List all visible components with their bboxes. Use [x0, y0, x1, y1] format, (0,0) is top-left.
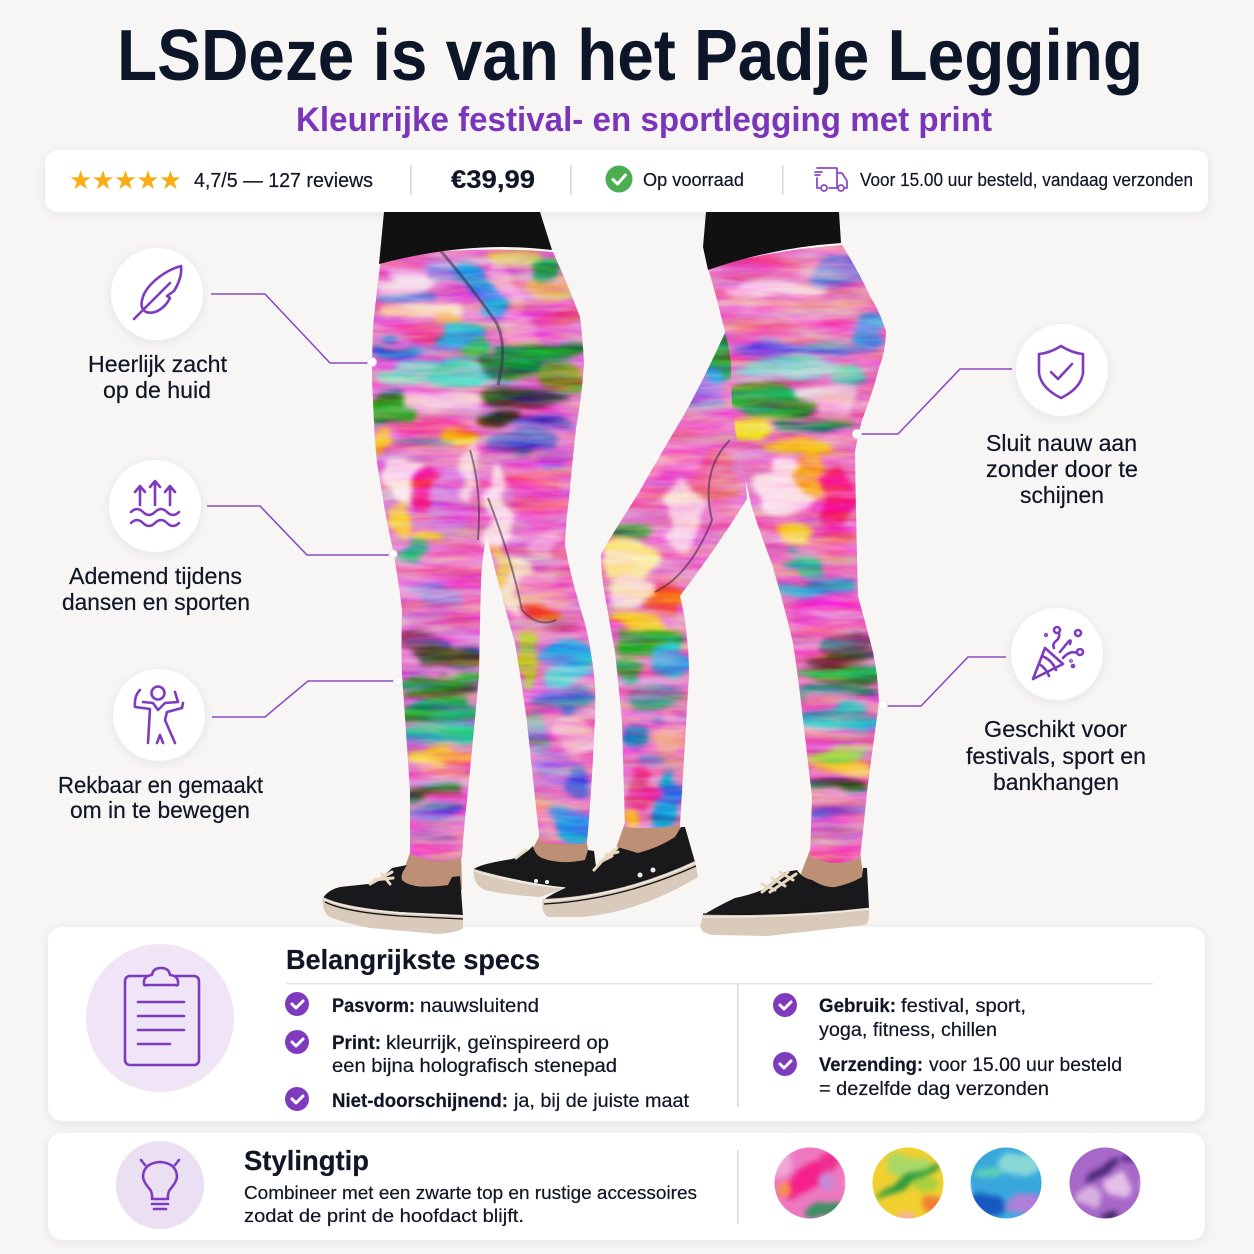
panel: styling tip	[48, 1133, 1205, 1240]
shoe: right front	[700, 868, 869, 936]
ankles	[398, 820, 864, 892]
icon: delivery truck	[815, 168, 847, 191]
spec: verzending: = dezelfde dag verzonden	[819, 1079, 1049, 1100]
price: €39,99	[451, 166, 535, 194]
label: dansen en sporten	[62, 589, 250, 615]
spec: pasvorm: Pasvorm:	[332, 996, 415, 1017]
spec: verzending: voor 15.00 uur besteld	[929, 1055, 1122, 1076]
label: festivals, sport en	[966, 743, 1146, 769]
spec: verzending: Verzending:	[819, 1055, 923, 1076]
tip text	[244, 1182, 697, 1226]
icon: feather	[134, 266, 181, 319]
feature: fit	[986, 324, 1138, 508]
feature: breathable	[62, 460, 250, 615]
spec: print: kleurrijk, geïnspireerd op	[386, 1033, 609, 1054]
heading: Belangrijkste specs	[286, 944, 540, 975]
icon: clipboard	[86, 944, 234, 1092]
stock text: Op voorraad	[643, 169, 744, 190]
front leg knee & calf	[408, 612, 471, 636]
spec: verzending	[773, 1052, 1122, 1100]
spec: print: Print:	[332, 1033, 381, 1054]
leggings: right figure back leg	[601, 332, 747, 828]
spec: gebruik	[773, 993, 1026, 1041]
feature: festivals	[966, 608, 1146, 795]
label: schijnen	[1020, 482, 1104, 508]
label	[986, 430, 1138, 508]
callout line: soft	[211, 294, 376, 366]
swatch: pink	[774, 1148, 846, 1218]
green band back	[490, 338, 584, 366]
leggings: left figure	[372, 250, 596, 862]
label	[88, 351, 228, 403]
swatch: yellow-green	[872, 1148, 944, 1218]
spec: gebruik: festival, sport,	[901, 996, 1026, 1017]
label: bankhangen	[993, 769, 1119, 795]
shoe: left front	[323, 865, 463, 934]
icon: rising air over waves	[131, 481, 179, 526]
spec: gebruik: Gebruik:	[819, 996, 896, 1017]
spec: print	[285, 1030, 617, 1077]
swatch: blue-teal	[970, 1148, 1042, 1218]
panel: specs	[48, 927, 1205, 1121]
label: Ademend tijdens	[69, 563, 242, 589]
feature: soft	[88, 248, 228, 403]
label: Geschikt voor	[984, 716, 1127, 742]
icon: shield	[1039, 346, 1083, 398]
label	[58, 772, 264, 823]
label	[62, 563, 250, 615]
rating stars: ★★★★★	[69, 166, 182, 196]
spec: gebruik: yoga, fitness, chillen	[819, 1020, 997, 1041]
back leg mid	[487, 465, 509, 565]
back leg calf	[516, 636, 538, 684]
black top: left	[379, 212, 552, 264]
callout line: breathable	[207, 506, 397, 558]
title: LSDeze is van het Padje Legging	[117, 16, 1143, 96]
spec: niet-doorschijnend: ja, bij de juiste maat	[513, 1091, 690, 1112]
subtitle: Kleurrijke festival- en sportlegging met print	[296, 101, 992, 139]
shoe: right back	[542, 827, 698, 917]
diagonal blue stripe	[422, 258, 461, 284]
tip text: Combineer met een zwarte top en rustige accessoires	[244, 1182, 697, 1203]
callout line: fit	[852, 369, 1012, 438]
black top: right	[703, 212, 841, 270]
shipping text: Voor 15.00 uur besteld, vandaag verzonden	[860, 170, 1193, 190]
label	[966, 716, 1146, 795]
product photo: leggings on two legs	[323, 212, 910, 936]
label: Heerlijk zacht	[88, 351, 228, 377]
thigh	[379, 456, 431, 500]
label: om in te bewegen	[70, 797, 250, 823]
leggings: right figure front leg	[708, 245, 886, 863]
spec: niet-doorschijnend	[285, 1087, 690, 1112]
hip streaks	[398, 264, 411, 268]
spec: pasvorm	[285, 992, 539, 1017]
callout line: festivals	[878, 657, 1006, 710]
icon: stock check	[606, 166, 632, 192]
green thigh	[368, 395, 416, 429]
label: zonder door te	[986, 456, 1138, 482]
spec: pasvorm: nauwsluitend	[420, 996, 539, 1017]
label: op de huid	[103, 377, 211, 403]
callout line: stretch	[212, 676, 402, 717]
tip text: zodat de print de hoofdact blijft.	[244, 1205, 524, 1226]
label: Rekbaar en gemaakt	[58, 772, 264, 798]
spec: print: een bijna holografisch stenepad	[332, 1056, 617, 1077]
icon: flexing figure	[135, 686, 183, 743]
shoe: left back	[474, 846, 598, 897]
label: Sluit nauw aan	[986, 430, 1137, 456]
info bar	[45, 150, 1208, 212]
feature: stretch	[58, 669, 264, 823]
rating text: 4,7/5 — 127 reviews	[194, 170, 373, 192]
heading: Stylingtip	[244, 1145, 369, 1176]
icon: party popper	[1033, 627, 1083, 679]
spec: niet-doorschijnend: Niet-doorschijnend:	[332, 1091, 508, 1112]
icon: light bulb	[116, 1141, 204, 1229]
swatch: purple	[1070, 1148, 1140, 1218]
